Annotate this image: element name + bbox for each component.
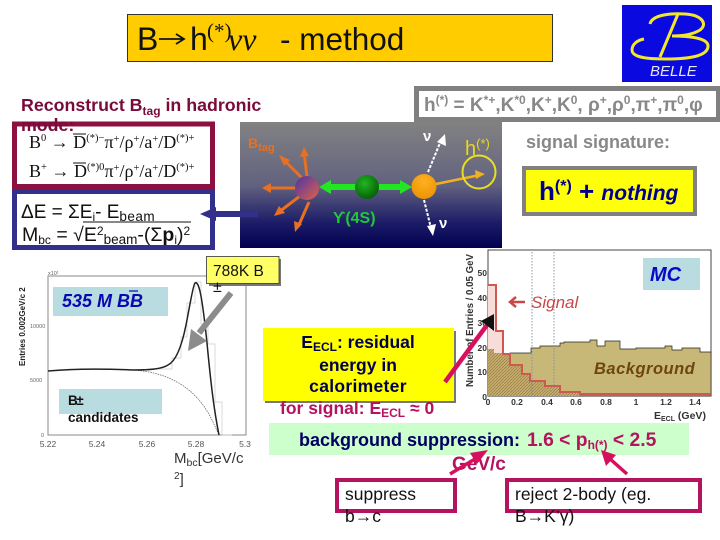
panel: h(*) mode list: 0: [677, 93, 684, 107]
panel: h(*) mode list: ,ρ: [607, 95, 624, 116]
axis label: Mbc: M: [174, 450, 186, 467]
label: Btag: tag: [258, 142, 275, 154]
callout: 788K B±: 788K B: [213, 263, 264, 280]
panel: hadronic tag modes: /D: [158, 132, 176, 152]
panel: kinematic variables: -(Σ: [137, 224, 162, 246]
panel: h(*) mode list: *0: [514, 93, 526, 107]
y ticks: 50: [478, 268, 487, 278]
panel: hadronic tag modes: /a: [139, 161, 152, 181]
label: 535 M BB: 535 M BB: [62, 291, 143, 311]
callout: EECL definition: calorimeter: [309, 376, 407, 396]
panel: background suppression: background suppression:: [299, 430, 520, 450]
label: B± candidates: candidates: [68, 410, 139, 425]
axis label: x: (GeV): [675, 410, 706, 422]
signal hatch: [488, 285, 503, 354]
y ticks: 30: [478, 318, 487, 328]
label: h(*): (*): [476, 136, 490, 151]
panel: h(*) mode list: ,φ: [684, 95, 703, 116]
panel: kinematic variables: 2: [97, 224, 104, 238]
panel: kinematic variables: beam: [104, 232, 137, 247]
title: h: [190, 21, 208, 57]
panel: kinematic variables: i: [92, 210, 95, 224]
box: reject 2-body: γ): [560, 506, 574, 526]
panel: hadronic tag modes: (*)+: [176, 162, 195, 173]
x ticks: 1.2: [660, 397, 672, 407]
heading: reconstruct Btag: tag: [143, 104, 161, 118]
panel: hadronic tag modes: +: [114, 163, 120, 174]
panel: kinematic variables: [14, 192, 212, 248]
panel: h(*) mode list: *+: [484, 93, 495, 107]
heading: reconstruct Btag: [21, 95, 261, 135]
panel: h(*) mode list: = K: [448, 95, 484, 116]
callout: EECL definition: E: [301, 332, 313, 352]
panel: hadronic tag modes: π: [104, 161, 114, 181]
panel: h(*) mode list: +: [650, 93, 657, 107]
heading: reconstruct Btag: Reconstruct B: [21, 95, 143, 115]
callout: h(*) + nothing: h: [539, 176, 555, 206]
panel: hadronic tag modes: +: [133, 134, 139, 145]
panel: kinematic variables: beam: [119, 209, 155, 224]
panel: h(*) mode list: [416, 88, 718, 120]
heading: reconstruct Btag: mode:: [21, 115, 74, 135]
panel: kinematic variables: p: [162, 224, 174, 246]
panel: hadronic tag modes: +: [152, 163, 158, 174]
title: [128, 14, 552, 62]
x ticks: 5.28: [188, 439, 205, 449]
arrow: suppress b to c: [450, 450, 488, 474]
axis label: Mbc: ]: [180, 471, 184, 488]
chart: EECL distribution: [465, 250, 711, 423]
panel: hadronic tag modes: 0: [41, 133, 46, 144]
panel: hadronic tag modes: → D: [47, 161, 87, 181]
callout: EECL definition: : residual: [337, 332, 415, 352]
x ticks: [486, 397, 701, 407]
box: reject 2-body: reject 2-body (eg.: [515, 484, 651, 504]
text: for signal: ECL: [381, 406, 405, 420]
label: Upsilon(4S): ϒ(4S): [333, 210, 376, 227]
fit curve: [48, 283, 219, 435]
panel: background suppression: h(*): [588, 438, 608, 452]
x ticks: 0.6: [570, 397, 582, 407]
logo: Belle: BELLE: [650, 63, 698, 80]
particle: Upsilon(4S): [355, 175, 379, 199]
title: νν: [228, 21, 257, 57]
x ticks: 5.26: [139, 439, 156, 449]
axis label: Mbc: bc: [186, 457, 198, 469]
callout: EECL definition: [263, 328, 456, 403]
y ticks: 0: [482, 392, 487, 402]
callout: EECL definition: ECL: [313, 340, 337, 354]
arrow: EECL to signal peak: [445, 314, 494, 382]
callout: h(*) + nothing: [524, 168, 695, 214]
y ticks: [30, 271, 59, 439]
callout: 788K B±: [206, 256, 281, 296]
title: B: [137, 21, 158, 57]
arrow: green Upsilon arrows: [319, 180, 412, 194]
panel: h(*) mode list: ,K: [526, 95, 545, 116]
label: MC: MC: [650, 264, 682, 286]
neutrino arrows: [424, 134, 446, 236]
y ticks: 10: [478, 367, 487, 377]
panel: hadronic tag modes: +: [152, 134, 158, 145]
panel: h(*) mode list: 0: [624, 93, 631, 107]
label: B± candidates: B±: [68, 393, 84, 408]
circle: h(*) marker: [462, 156, 496, 188]
axis label: Mbc: [GeV/c: [198, 450, 244, 467]
panel: h(*) mode list: +: [600, 93, 607, 107]
panel: hadronic tag modes: [14, 124, 212, 186]
x ticks: [40, 439, 251, 449]
particle: Btag B meson: [295, 176, 319, 200]
text: GeV/c: GeV/c: [452, 454, 506, 475]
label: nu lower: ν: [439, 215, 447, 232]
axis label: x: E: [654, 410, 661, 422]
box: suppress b to c: [337, 480, 455, 526]
callout: EECL definition: energy in: [319, 355, 397, 375]
text: for signal: for signal: E: [280, 398, 381, 418]
box: reject 2-body: [507, 480, 700, 526]
label: B± candidates: [59, 389, 162, 425]
panel: h(*) mode list: ,K: [552, 95, 571, 116]
title: (*): [207, 19, 232, 43]
box: reject 2-body: B→K: [515, 506, 556, 526]
panel: hadronic tag modes: +: [41, 162, 47, 173]
callout: h(*) + nothing: +: [572, 176, 601, 206]
panel: background suppression: < 2.5: [608, 430, 657, 451]
panel: h(*) mode list: ,π: [630, 95, 651, 116]
x ticks: 0: [486, 397, 491, 407]
label: Btag: B: [248, 135, 258, 151]
text: for signal: ≈ 0: [405, 398, 434, 418]
panel: hadronic tag modes: (*)0: [87, 162, 104, 173]
arrow: to kinematic variables: [200, 207, 258, 221]
panel: kinematic variables: ): [177, 224, 183, 246]
panel: hadronic tag modes: B: [29, 132, 41, 152]
y ticks: x10¹: [48, 271, 59, 277]
y ticks: 40: [478, 293, 487, 303]
box: reject 2-body: *: [556, 509, 560, 520]
y ticks: 0: [41, 433, 44, 439]
background histogram: [488, 340, 711, 396]
panel: kinematic variables: bc: [38, 233, 51, 247]
particle: signal B meson: [412, 174, 436, 199]
callout: h(*) + nothing: (*): [555, 178, 572, 195]
panel: kinematic variables: = √E: [51, 224, 97, 246]
panel: hadronic tag modes: (*)−: [86, 133, 105, 144]
y axis label: Number of Entries / 0.05 GeV: [465, 253, 476, 387]
panel: decay diagram: [240, 122, 502, 248]
panel: hadronic tag modes: → D: [46, 132, 86, 152]
panel: hadronic tag modes: /D: [158, 161, 176, 181]
panel: hadronic tag modes: (*)+: [176, 133, 195, 144]
signal histogram: [488, 285, 711, 394]
x ticks: 0.4: [541, 397, 553, 407]
x ticks: 1.4: [689, 397, 701, 407]
label: 535 M BB: [53, 287, 168, 316]
Btag decay arrows: [262, 147, 309, 232]
axis label: Mbc: [174, 450, 244, 488]
panel: hadronic tag modes: /ρ: [119, 132, 133, 152]
label: Signal: Signal: [531, 293, 579, 312]
background fit curve: [133, 370, 219, 435]
label: Signal: [510, 293, 579, 312]
callout: h(*) + nothing: nothing: [601, 182, 679, 205]
panel: kinematic variables: 2: [183, 224, 190, 238]
x ticks: 1: [634, 397, 639, 407]
x ticks: 5.22: [40, 439, 57, 449]
panel: kinematic variables: i: [174, 233, 177, 247]
y ticks: 20: [478, 343, 487, 353]
axis label: Mbc: 2: [174, 471, 180, 482]
chart: Mbc distribution: [18, 271, 251, 449]
y ticks: [478, 268, 487, 402]
panel: h(*) mode list: 0: [571, 93, 578, 107]
heading: signal signature: signal signature:: [526, 132, 670, 152]
panel: hadronic tag modes: /a: [139, 132, 152, 152]
x ticks: 5.24: [89, 439, 106, 449]
arrow: hadron track: [436, 170, 485, 184]
panel: h(*) mode list: h: [424, 95, 436, 116]
axis label: x: ECL: [661, 416, 676, 423]
panel: hadronic tag modes: +: [133, 163, 139, 174]
box: suppress b to c: suppress: [345, 484, 416, 504]
arrow: gray pointer to peak: [188, 293, 231, 351]
panel: h(*) mode list: (*): [436, 93, 448, 107]
x ticks: 0.2: [511, 397, 523, 407]
y ticks: 5000: [30, 378, 42, 384]
panel: hadronic tag modes: B: [29, 161, 41, 181]
panel: h(*) mode list: ,K: [495, 95, 515, 116]
arrow: reject 2-body: [601, 450, 627, 474]
box: suppress b to c: b→c: [345, 506, 381, 526]
panel: h(*) mode list: , ρ: [577, 95, 600, 116]
callout: 788K B±: ±: [213, 279, 222, 296]
x ticks: 5.3: [239, 439, 251, 449]
panel: background suppression: [269, 423, 689, 455]
y ticks: 10000: [30, 324, 45, 330]
title: - method: [280, 21, 404, 57]
panel: h(*) mode list: ,π: [657, 95, 678, 116]
panel: kinematic variables: M: [22, 224, 38, 246]
x ticks: 0.8: [600, 397, 612, 407]
panel: background suppression: 1.6 < p: [527, 430, 588, 451]
cut lines: [532, 252, 554, 396]
label: Background: Background: [594, 360, 696, 378]
label: h(*): h: [465, 138, 476, 160]
panel: hadronic tag modes: +: [114, 134, 120, 145]
label: MC: [643, 258, 700, 290]
label: nu upper: ν: [423, 128, 431, 145]
panel: hadronic tag modes: π: [104, 132, 114, 152]
panel: kinematic variables: ΔE = ΣE: [21, 202, 92, 223]
axis label: y: Entries 0.002GeV/c 2: [18, 287, 27, 366]
histogram: [150, 282, 232, 435]
panel: hadronic tag modes: /ρ: [119, 161, 133, 181]
panel: kinematic variables: - E: [95, 202, 119, 223]
panel: h(*) mode list: +: [545, 93, 552, 107]
logo: Belle: [622, 5, 712, 82]
heading: reconstruct Btag: in hadronic: [161, 95, 261, 115]
